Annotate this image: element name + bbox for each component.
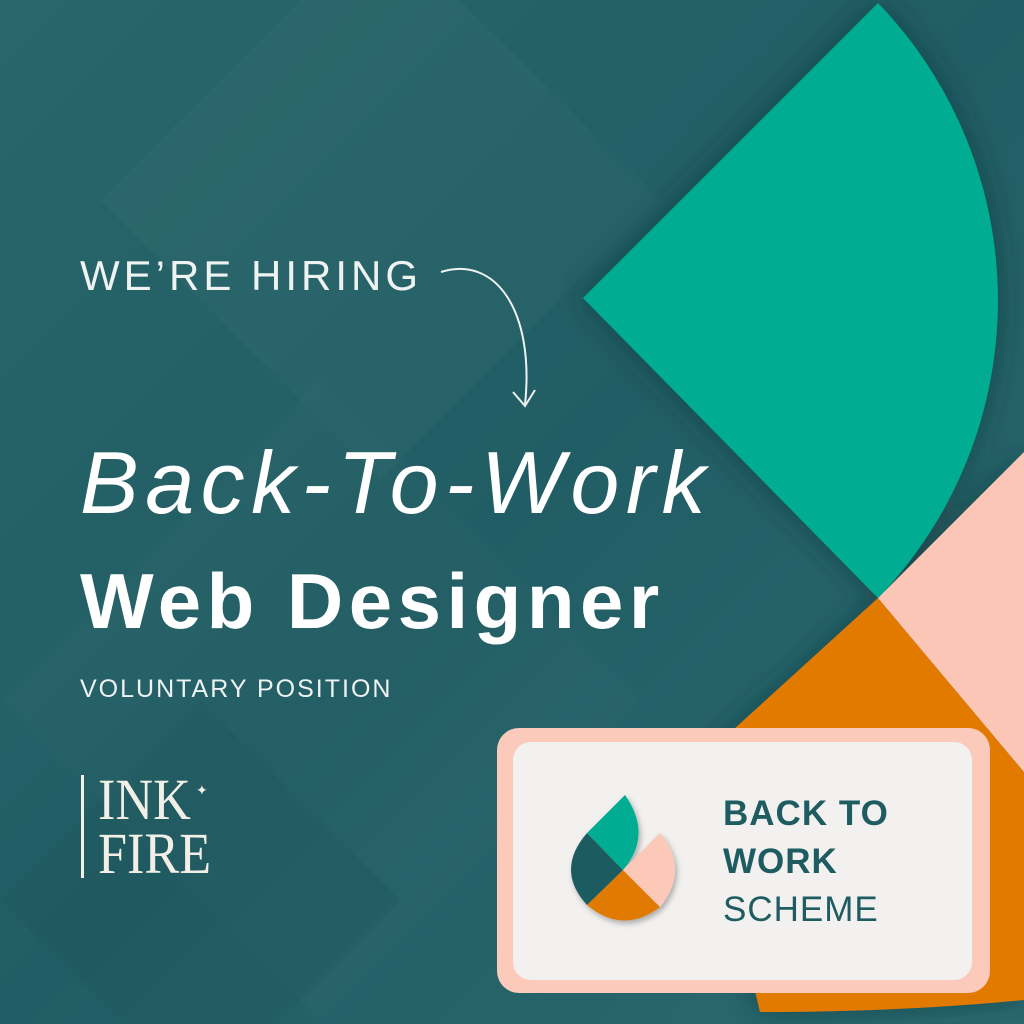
logo: ink fire: INK bbox=[98, 767, 191, 832]
orange segment bbox=[700, 598, 1024, 1012]
badge text: SCHEME bbox=[723, 890, 879, 929]
logo: ink fire: FIRE bbox=[98, 821, 211, 886]
badge text: WORK bbox=[723, 842, 838, 881]
badge: back to work scheme bbox=[497, 728, 990, 993]
heading: we're hiring: WE’RE HIRING bbox=[80, 252, 422, 299]
icon: scheme logo bbox=[570, 795, 680, 927]
badge text bbox=[723, 794, 889, 929]
pink segment bbox=[878, 452, 1024, 772]
badge text: BACK TO bbox=[723, 794, 889, 833]
logo: ink fire bbox=[81, 767, 211, 886]
logo: ink fire: ✦ bbox=[196, 782, 208, 798]
title bold: Web Designer bbox=[80, 557, 665, 645]
title italic: Back-To-Work bbox=[80, 433, 712, 532]
teal segment bbox=[583, 3, 998, 598]
subtitle: VOLUNTARY POSITION bbox=[80, 675, 392, 703]
arrow bbox=[440, 268, 536, 408]
